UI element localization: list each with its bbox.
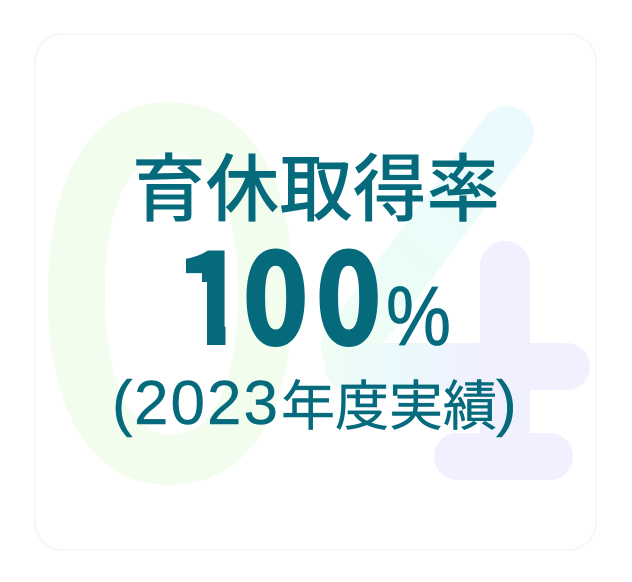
value: 100%: 0 <box>242 199 309 382</box>
note: fiscal year: 2023 <box>134 369 278 438</box>
value: 100%: 0 <box>315 199 382 382</box>
note: fiscal year: ) <box>496 369 517 438</box>
value: 100% <box>186 248 449 347</box>
value: 100%: 1 <box>172 198 249 382</box>
panel: card <box>35 34 596 550</box>
infographic <box>34 33 597 551</box>
title: 育休取得率 <box>132 148 500 231</box>
numeral background: 4 <box>325 133 590 480</box>
value: 100%: % <box>386 269 451 363</box>
numeral background: 0 <box>48 102 293 485</box>
note: fiscal year <box>112 369 517 438</box>
note: fiscal year: 年度実績 <box>281 377 497 437</box>
note: fiscal year: ( <box>112 369 133 438</box>
